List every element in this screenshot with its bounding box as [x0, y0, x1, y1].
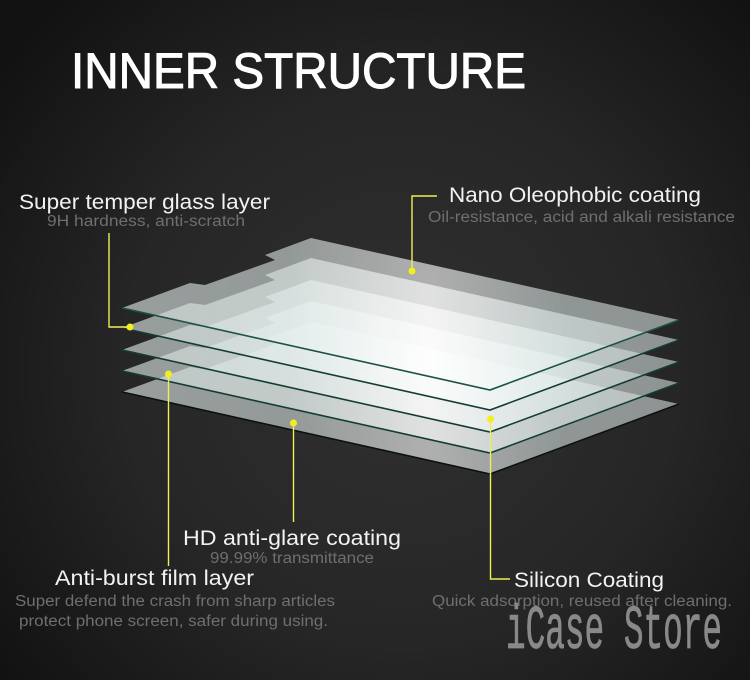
- label: anti-burst film layer: Anti-burst film layer: [55, 567, 254, 590]
- title: INNER STRUCTURE: [71, 43, 526, 99]
- label: silicon coating: [432, 569, 732, 610]
- layered glass sheets: [122, 238, 679, 474]
- label: silicon coating: Silicon Coating: [514, 569, 664, 592]
- callout line: nano oleophobic coating: [408, 196, 437, 274]
- label: nano oleophobic coating: [428, 184, 735, 226]
- label: super temper glass layer: Super temper glass layer: [19, 191, 270, 214]
- callout line: HD anti-glare coating: [290, 420, 297, 522]
- callout line: anti-burst film layer: [165, 370, 172, 566]
- label: anti-burst film layer: protect phone screen, safer during using.: [19, 613, 328, 630]
- label: anti-burst film layer: [15, 567, 335, 630]
- label: nano oleophobic coating: Oil-resistance, acid and alkali resistance: [428, 209, 735, 226]
- callout line: super temper glass layer: [109, 233, 134, 330]
- label: super temper glass layer: 9H hardness, anti-scratch: [47, 213, 245, 230]
- label: HD anti-glare coating: 99.99% transmittance: [210, 550, 374, 567]
- label: nano oleophobic coating: Nano Oleophobic coating: [449, 184, 701, 207]
- label: HD anti-glare coating: HD anti-glare coating: [183, 527, 401, 550]
- label: HD anti-glare coating: [183, 527, 401, 567]
- label: silicon coating: Quick adsorption, reused after cleaning.: [432, 593, 732, 610]
- callout line: silicon coating: [487, 416, 510, 579]
- label: anti-burst film layer: Super defend the crash from sharp articles: [15, 593, 335, 610]
- label: super temper glass layer: [19, 191, 270, 230]
